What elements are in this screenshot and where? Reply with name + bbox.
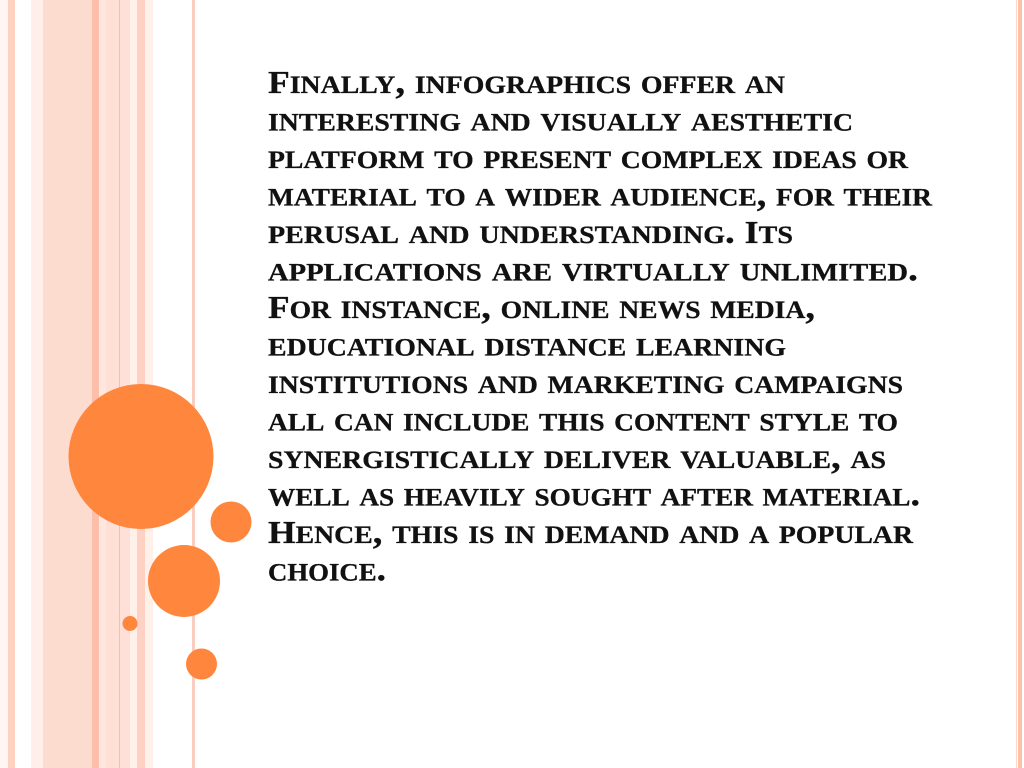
right edge stripe (1016, 0, 1022, 768)
body paragraph: platform to present complex ideas or (268, 137, 909, 176)
body paragraph: educational distance learning (268, 324, 786, 364)
body paragraph: choice. (268, 550, 386, 588)
body paragraph: perusal and understanding. Its (268, 212, 793, 251)
body paragraph: synergistically deliver valuable, as (268, 437, 886, 476)
left stripe band (0, 0, 195, 768)
body paragraph: institutions and marketing campaigns (268, 362, 903, 401)
body paragraph: all can include this content style to (268, 400, 898, 438)
body paragraph: For instance, online news media, (268, 287, 815, 326)
body paragraph: well as heavily sought after material. (268, 474, 920, 514)
decorative orange circles (68, 384, 252, 680)
body paragraph: applications are virtually unlimited. (268, 250, 918, 288)
body paragraph: Finally, infographics offer an (268, 62, 785, 101)
body paragraph (268, 62, 933, 588)
body paragraph: interesting and visually aesthetic (268, 100, 853, 138)
body paragraph: material to a wider audience, for their (268, 174, 933, 214)
body paragraph: Hence, this is in demand and a popular (268, 512, 914, 551)
